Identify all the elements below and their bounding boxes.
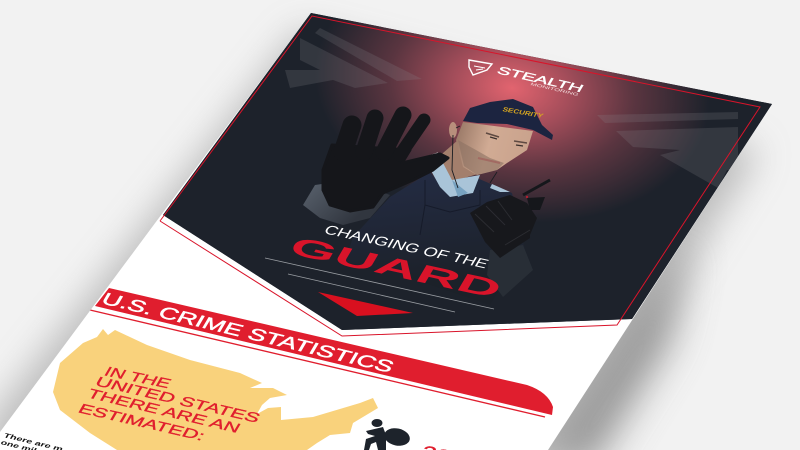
raised glove [323, 115, 448, 211]
guard eyes and mouth [478, 133, 527, 163]
guard beard [458, 140, 504, 175]
map headline [75, 365, 263, 444]
red frame line [160, 16, 760, 336]
guard ear [449, 122, 457, 138]
guard face [456, 122, 533, 175]
red triangle arrow [318, 292, 413, 316]
vest seam [420, 180, 480, 235]
logo shield [469, 60, 492, 75]
body text [0, 433, 64, 450]
guard shirt [429, 163, 480, 197]
section heading: U.S. CRIME STATISTICS [98, 289, 398, 376]
sleeve [303, 180, 390, 225]
guard neck [442, 142, 476, 180]
earpiece wire [452, 126, 497, 188]
logo subtitle: MONITORING [529, 82, 580, 97]
title rule two [288, 274, 455, 312]
glove fingers [343, 115, 424, 155]
section body [0, 288, 553, 450]
heading underline [90, 310, 545, 417]
title: guard: GUARD [284, 232, 508, 304]
panel: dark hero [160, 13, 772, 336]
title rule one [265, 258, 494, 309]
photo: security guard [303, 99, 553, 305]
map headline: IN THE [101, 365, 174, 392]
icon: thief [364, 419, 411, 450]
map headline: UNITED STATES [92, 375, 263, 426]
ghost logo right [597, 112, 738, 188]
guard body [350, 173, 512, 246]
title: changing of the: CHANGING OF THE [321, 222, 492, 271]
thumb highlight [430, 152, 438, 155]
body text: There are m [2, 433, 64, 450]
logo wordmark: STEALTH [494, 65, 585, 95]
radio [523, 180, 550, 210]
section heading band [90, 288, 553, 417]
map headline: THERE ARE AN [84, 387, 243, 436]
second glove [470, 195, 537, 258]
map headline: ESTIMATED: [75, 402, 208, 444]
forearm [487, 245, 533, 297]
glove fingers [475, 201, 530, 245]
ghost logo left [285, 28, 422, 88]
logo [469, 60, 585, 97]
map of the united states [53, 329, 378, 450]
guard cap [463, 99, 553, 140]
cap label: SECURITY [501, 106, 545, 120]
